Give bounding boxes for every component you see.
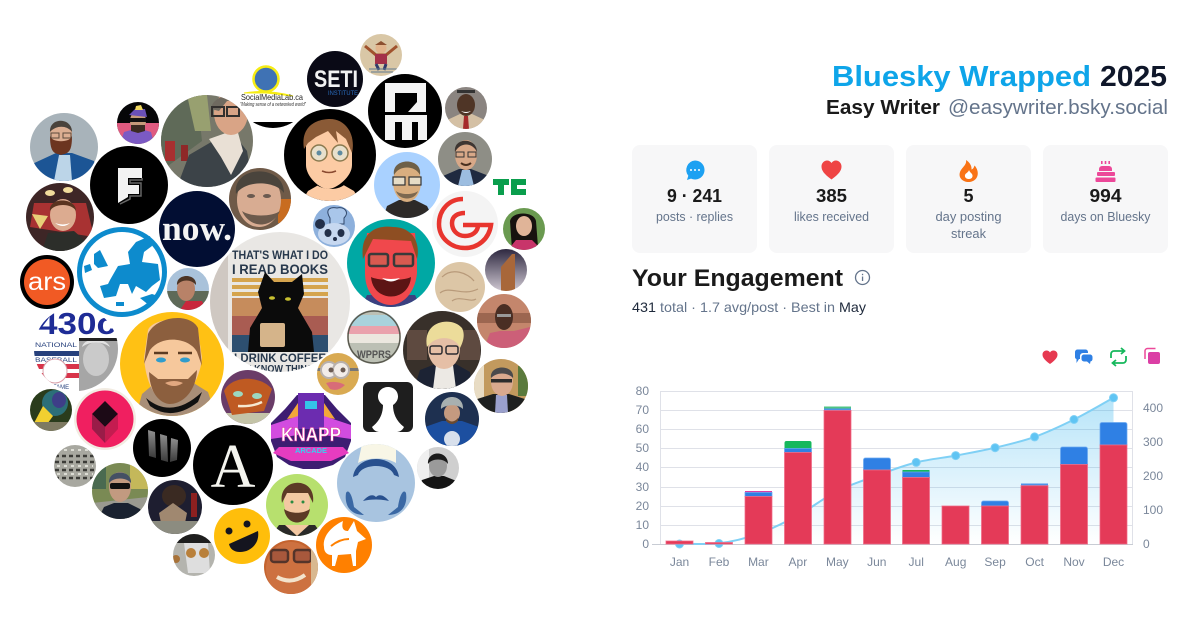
avatar: man holding a drink xyxy=(26,183,94,251)
avatar: man with glasses and blazer xyxy=(438,132,492,186)
right axis labels: 300 xyxy=(1143,435,1163,449)
best month: May xyxy=(839,299,866,315)
icon: cake xyxy=(1096,161,1116,182)
bar: Sep xyxy=(982,501,1008,544)
user name and handle xyxy=(826,97,1168,119)
avatar: cat with coffee T-shirt xyxy=(210,232,350,375)
left axis labels: 60 xyxy=(636,422,649,436)
bar: Oct xyxy=(1021,484,1048,544)
bar: Dec xyxy=(1100,422,1127,544)
avatar: owl pastry photo xyxy=(172,534,215,576)
avatar: man close-up xyxy=(229,168,291,230)
bar: Jun xyxy=(864,458,890,544)
icon: heart xyxy=(822,160,842,180)
value: 994 xyxy=(1090,186,1122,206)
month labels: Aug xyxy=(945,555,966,569)
avatar: minion close-up xyxy=(317,353,359,395)
left axis labels: 80 xyxy=(636,384,649,398)
bar: Feb xyxy=(706,542,732,544)
right axis labels xyxy=(1143,401,1163,551)
left axis labels: 0 xyxy=(642,537,649,551)
avatar: man singing in pink shirt xyxy=(477,294,531,348)
avatar: crowd photo xyxy=(54,445,96,487)
avatar: man with cravat and glasses xyxy=(161,91,253,187)
heading: Your Engagement: Your Engagement xyxy=(632,265,843,292)
value: 9 · 241 xyxy=(667,186,722,206)
left axis labels xyxy=(636,384,649,551)
avatar: Knapp Arcade logo: KNAPP xyxy=(281,425,341,446)
month labels: Jun xyxy=(867,555,886,569)
title: year: 2025 xyxy=(1100,61,1167,93)
avatar: AM logo xyxy=(368,74,442,148)
avatar: SocialMediaLab logo: "Making sense of a networked world" xyxy=(240,102,306,108)
avatar: 430c and baseball hall of fame collage xyxy=(34,306,118,391)
total number: 431 xyxy=(632,299,656,315)
avatar: cat with coffee T-shirt: THAT'S WHAT I DO xyxy=(232,250,328,262)
handle: @easywriter.bsky.social xyxy=(948,97,1168,119)
left axis labels: 20 xyxy=(636,499,649,513)
legend: replies bubbles xyxy=(1075,350,1092,364)
avatar: WPPRS badge xyxy=(347,310,401,364)
bar: Nov xyxy=(1060,447,1088,544)
icon: info xyxy=(856,270,870,284)
bar: Jan xyxy=(666,541,693,544)
avatar: Europe map xyxy=(80,230,164,314)
avatar: Knapp Arcade logo: ARCADE xyxy=(295,446,327,455)
cumulative area xyxy=(680,398,1114,544)
engagement summary xyxy=(632,299,866,315)
left axis labels: 40 xyxy=(636,460,649,474)
engagement chart xyxy=(636,384,1163,569)
month labels: Dec xyxy=(1103,555,1124,569)
bar: Aug xyxy=(942,506,969,544)
month labels: Sep xyxy=(984,555,1006,569)
cumulative line xyxy=(680,398,1114,544)
value: 5 xyxy=(963,186,974,206)
avatar: 430c and baseball hall of fame collage: OF FAME xyxy=(43,385,69,391)
month labels: Feb xyxy=(709,555,730,569)
icon: chat bubble xyxy=(686,160,705,180)
display name: Easy Writer xyxy=(826,97,940,119)
label second line: streak xyxy=(951,226,986,241)
avatar: pink Polygon logo xyxy=(74,388,136,450)
avatar: 430c and baseball hall of fame collage: NATIONAL xyxy=(35,343,78,349)
cumulative points xyxy=(676,394,1118,548)
avatar: sand sketch xyxy=(435,262,485,312)
bar: May xyxy=(824,406,851,544)
avatar: red G logo xyxy=(432,191,498,257)
stat card: posts and replies xyxy=(632,145,757,253)
avatar: keyhole logo xyxy=(363,382,413,432)
month labels: Jan xyxy=(670,555,689,569)
label: posts · replies xyxy=(656,209,733,224)
avatar: W logo xyxy=(133,419,191,477)
right axis labels: 0 xyxy=(1143,537,1150,551)
month labels: Jul xyxy=(909,555,924,569)
avatar: SETI Institute logo: SETI xyxy=(314,66,358,93)
avatar: A logo xyxy=(193,425,273,505)
avatar: cartoon boy xyxy=(360,34,402,76)
title: Bluesky Wrapped: Bluesky Wrapped xyxy=(832,61,1091,93)
avatar: SocialMediaLab logo: SocialMediaLab.ca xyxy=(241,92,303,102)
avatar: cat with coffee T-shirt: & I KNOW THINGS xyxy=(240,364,320,375)
stat card: day posting streak xyxy=(906,145,1031,253)
stat card: likes received xyxy=(769,145,894,253)
chart legend icons xyxy=(1042,348,1160,366)
bar: Apr xyxy=(784,441,812,544)
stat card: days on Bluesky xyxy=(1043,145,1168,253)
avatar: smiling man in dark sweater xyxy=(474,359,528,413)
avatar: ars logo xyxy=(20,255,74,309)
avatar: ars logo: ars xyxy=(28,268,66,296)
legend: quotes squares xyxy=(1145,348,1160,364)
title xyxy=(832,61,1167,93)
right axis labels: 200 xyxy=(1143,469,1163,483)
avatar: yellow smiley xyxy=(214,508,270,564)
avatar: cartoon bearded man on yellow xyxy=(120,312,224,416)
label: days on Bluesky xyxy=(1060,209,1151,224)
avatar: pixel man with sunglasses xyxy=(117,102,159,144)
avatar: TechCrunch logo xyxy=(493,179,526,195)
avatar: dark photo xyxy=(148,480,202,534)
avatar: cat with coffee T-shirt: I DRINK COFFEE xyxy=(234,351,326,365)
month labels xyxy=(670,555,1124,569)
avatar: cartoon man on black background xyxy=(284,109,376,201)
left axis labels: 30 xyxy=(636,480,649,494)
avatar: skyscraper xyxy=(485,249,527,291)
avatar: mallard duck xyxy=(30,389,72,431)
left axis labels: 50 xyxy=(636,441,649,455)
avatar: SETI Institute logo: INSTITUTE xyxy=(328,90,359,97)
avatar: blond person with glasses xyxy=(403,311,481,389)
avatar: SETI Institute logo xyxy=(307,51,363,107)
avatar: orange fox logo xyxy=(316,517,372,573)
legend: likes heart xyxy=(1042,350,1058,364)
value: 385 xyxy=(816,186,847,206)
avatar: SocialMediaLab logo xyxy=(236,66,310,128)
summary text: total · 1.7 avg/post · Best in xyxy=(660,299,835,315)
right axis labels: 400 xyxy=(1143,401,1163,415)
label: day posting xyxy=(936,209,1002,224)
month labels: May xyxy=(826,555,849,569)
avatar: cartoon man on green xyxy=(266,474,328,536)
avatar: bearded man in blue suit xyxy=(30,113,98,181)
left axis labels: 10 xyxy=(636,518,649,532)
avatar: blue cyanotype face with moustache xyxy=(337,444,415,522)
month labels: Nov xyxy=(1063,555,1085,569)
legend: reposts arrows xyxy=(1111,348,1126,366)
label: likes received xyxy=(794,209,869,224)
month labels: Oct xyxy=(1025,555,1045,569)
icon: flame xyxy=(960,160,978,182)
avatar: WPPRS badge: WPPRS xyxy=(357,349,391,361)
avatar: 430c and baseball hall of fame collage: BASEBALL xyxy=(35,358,78,364)
avatar: now logo xyxy=(159,191,235,267)
right axis labels: 100 xyxy=(1143,503,1163,517)
avatar: black and white portrait xyxy=(417,447,459,489)
bar: Jul xyxy=(902,470,930,544)
avatar: man in suit and red tie xyxy=(445,87,487,129)
avatar: orange creature xyxy=(221,370,275,424)
avatar: now logo: now. xyxy=(162,209,232,248)
bar: Mar xyxy=(745,491,772,544)
avatar: 430c and baseball hall of fame collage: 430c xyxy=(38,306,116,341)
avatar cluster xyxy=(20,34,545,596)
month labels: Apr xyxy=(789,555,807,569)
avatar: Knapp Arcade logo xyxy=(271,393,351,469)
avatar: man in sunglasses xyxy=(92,463,148,519)
avatar: pop-art man on teal xyxy=(347,219,435,307)
avatar: young man outdoors xyxy=(167,268,209,310)
avatar: red-toned man with glasses xyxy=(264,540,318,596)
left axis labels: 70 xyxy=(636,403,649,417)
avatar: F logo xyxy=(90,146,168,224)
avatar: A logo: A xyxy=(211,433,256,501)
month labels: Mar xyxy=(748,555,769,569)
stacked bars xyxy=(666,406,1127,544)
avatar: panda chef xyxy=(313,205,355,247)
avatar: hockey goalie xyxy=(425,392,479,447)
avatar: cat with coffee T-shirt: I READ BOOKS xyxy=(232,262,328,277)
avatar: woman with dark hair xyxy=(503,208,545,250)
avatar: cartoon bald man on light blue xyxy=(374,152,440,218)
